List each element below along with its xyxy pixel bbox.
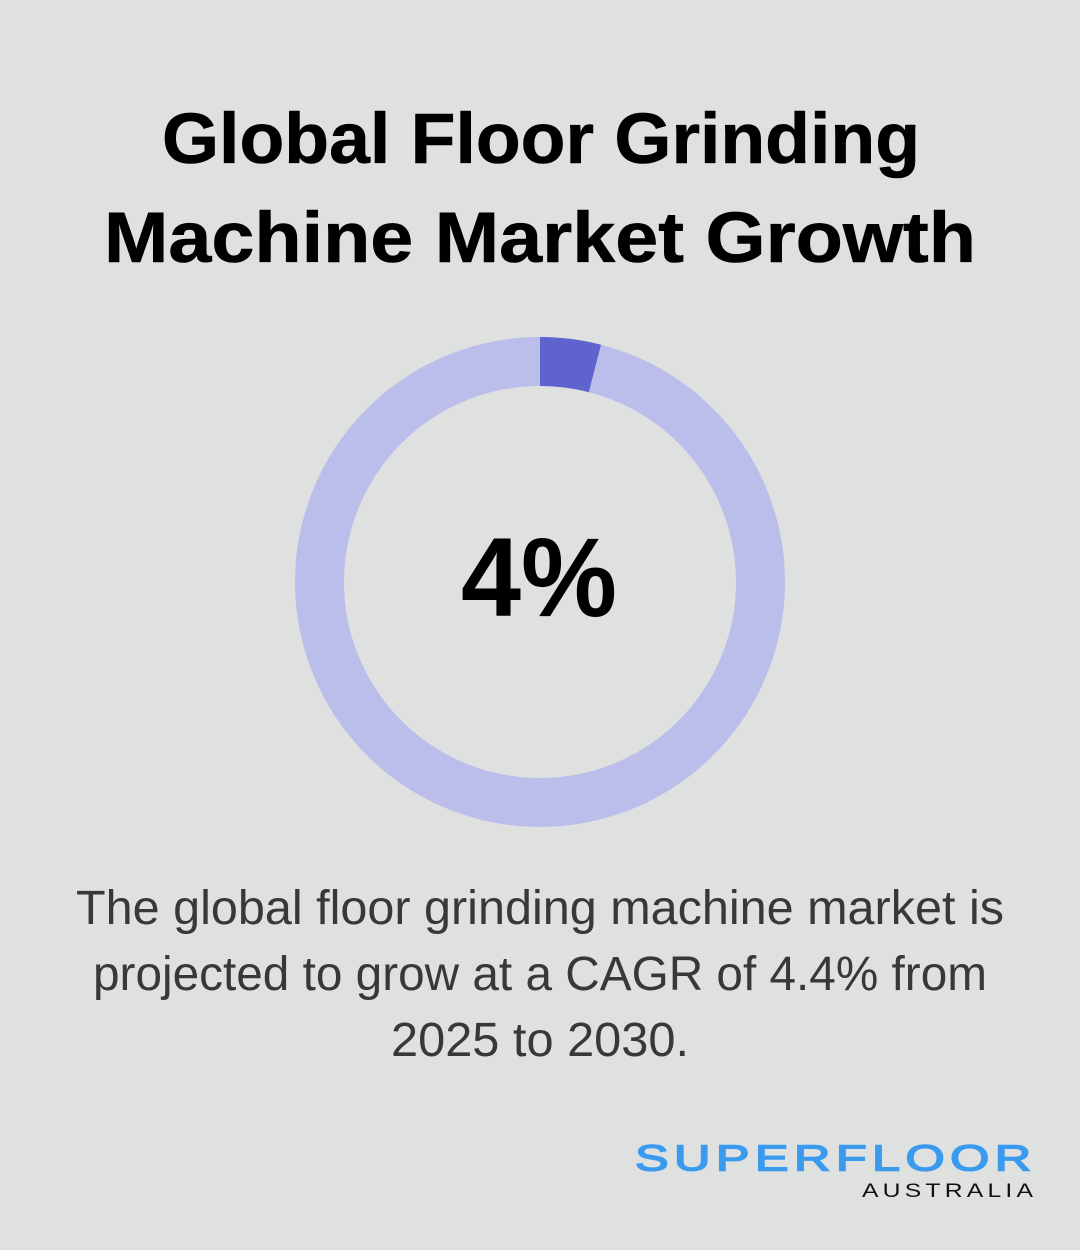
title <box>104 100 976 278</box>
donut chart <box>320 337 760 802</box>
description text: projected to grow at a CAGR of 4.4% from <box>93 948 987 1001</box>
title: Machine Market Growth <box>104 199 976 278</box>
logo <box>635 1138 1033 1201</box>
logo wordmark: SUPERFLOOR <box>635 1138 1031 1179</box>
description text: The global floor grinding machine market is <box>76 882 1004 935</box>
donut value segment <box>540 337 601 392</box>
donut track <box>320 362 760 802</box>
description text <box>76 882 1004 1067</box>
description text: 2025 to 2030. <box>391 1014 689 1067</box>
donut value label: 4% <box>461 515 617 640</box>
title: Global Floor Grinding <box>162 100 920 179</box>
logo subtitle: AUSTRALIA <box>862 1180 1033 1201</box>
